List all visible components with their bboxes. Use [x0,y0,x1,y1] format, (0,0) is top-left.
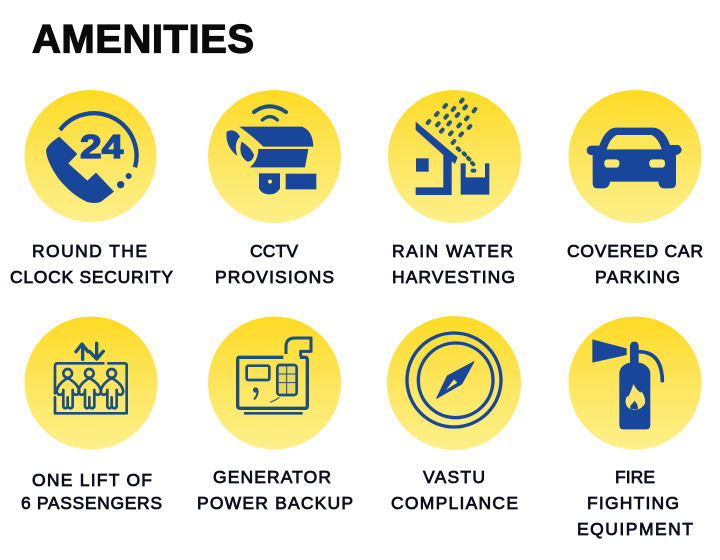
icon: phone with 24: 24 [80,129,124,166]
icon: generator [238,338,311,413]
icon: cctv camera [226,106,316,194]
badge circle [24,90,156,222]
badge circle [208,316,341,450]
amenity: vastu compliance [387,316,521,513]
badge circle [387,316,521,450]
label: VASTU [423,467,485,487]
label [21,470,162,513]
label: PROVISIONS [215,267,334,287]
label: CCTV [250,241,298,261]
label [391,467,518,513]
amenity: rain water harvesting [388,90,521,287]
label: CLOCK SECURITY [10,267,173,287]
amenity: fire fighting equipment [568,316,702,539]
icon: lift with passengers [55,343,127,413]
label [215,241,334,287]
label: EQUIPMENT [577,519,693,539]
label: ONE LIFT OF [32,470,152,490]
label [197,467,353,513]
badge circle [568,90,702,223]
icon: rain on house and tank [416,100,489,195]
label [392,241,515,287]
badge circle [388,90,521,223]
label [577,467,693,539]
label: GENERATOR [213,467,331,487]
label: ROUND THE [32,241,147,261]
icon: fire extinguisher [592,339,662,429]
badge circle [24,316,158,450]
badge circle [568,316,702,450]
label: POWER BACKUP [197,493,353,513]
label: HARVESTING [392,267,515,287]
label: PARKING [595,267,680,287]
amenity: covered car parking [567,90,703,287]
label: FIGHTING [587,493,679,513]
label [10,241,173,287]
amenity: cctv provisions [208,90,341,287]
amenity: round the clock security [10,90,173,287]
icon: phone with 24 [46,113,137,203]
icon: compass [407,333,501,427]
badge circle [208,90,341,223]
label: 6 PASSENGERS [21,493,162,513]
amenity: one lift of 6 passengers [21,316,162,513]
icon: car [587,128,682,188]
label: FIRE [615,467,655,487]
title: AMENITIES [32,18,254,62]
label: COMPLIANCE [391,493,518,513]
label [567,241,703,287]
label: COVERED CAR [567,241,703,261]
label: RAIN WATER [392,241,513,261]
amenity: generator power backup [197,316,353,513]
